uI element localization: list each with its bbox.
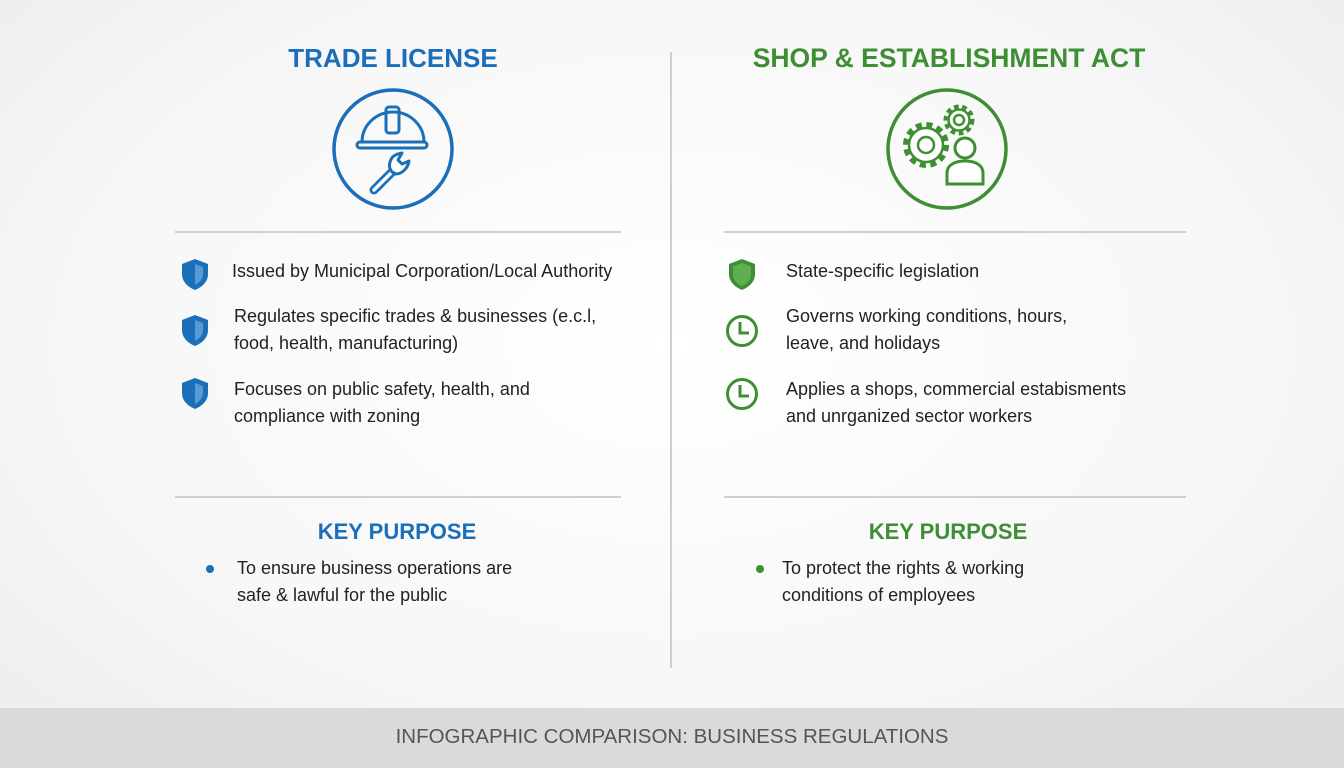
clock 1 <box>726 315 758 347</box>
divider vertical <box>670 52 672 668</box>
left title: TRADE LICENSE <box>288 43 498 73</box>
footer <box>0 708 1344 768</box>
left items: compliance with zoning <box>234 406 420 426</box>
right items: and unrganized sector workers <box>786 406 1032 426</box>
left key purpose: KEY PURPOSE <box>318 519 476 544</box>
shield 2 <box>182 315 208 346</box>
shield 1 <box>182 259 208 290</box>
footer: INFOGRAPHIC COMPARISON: BUSINESS REGULATIONS <box>396 725 948 748</box>
left items <box>182 259 612 426</box>
right items <box>726 259 1126 426</box>
left items: Focuses on public safety, health, and <box>234 379 530 399</box>
right key purpose: KEY PURPOSE <box>869 519 1027 544</box>
right title: SHOP & ESTABLISHMENT ACT <box>753 43 1145 73</box>
shield 3 <box>182 378 208 409</box>
text: To ensure business operations are <box>237 558 512 578</box>
text: safe & lawful for the public <box>237 585 447 605</box>
right items: leave, and holidays <box>786 333 940 353</box>
right items: State-specific legislation <box>786 261 979 281</box>
text: conditions of employees <box>782 585 975 605</box>
right items: Applies a shops, commercial estabisments <box>786 379 1126 399</box>
left items: food, health, manufacturing) <box>234 333 458 353</box>
icon: gears and person <box>886 88 1008 210</box>
left items: Regulates specific trades & businesses (e.c.l, <box>234 306 596 326</box>
right items: Governs working conditions, hours, <box>786 306 1067 326</box>
left items: Issued by Municipal Corporation/Local Authority <box>232 261 612 281</box>
icon: helmet and wrench <box>332 88 454 210</box>
clock 2 <box>726 378 758 410</box>
text: To protect the rights & working <box>782 558 1024 578</box>
shield green <box>729 259 755 290</box>
